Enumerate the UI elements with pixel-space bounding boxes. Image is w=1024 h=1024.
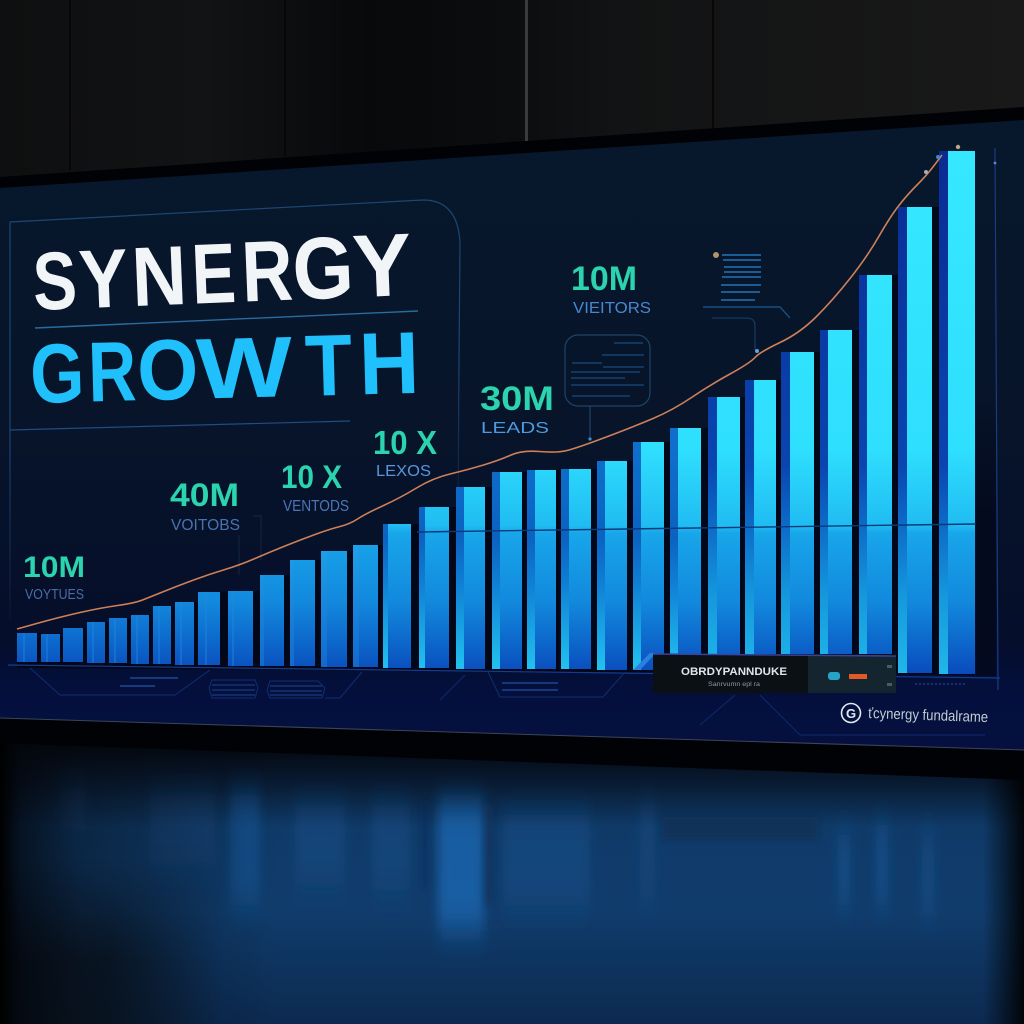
- chart base line: [8, 665, 1000, 678]
- lit wedge under panel: [633, 653, 656, 670]
- callout: 10M visitors: VIEITORS: [573, 300, 651, 317]
- bar 8: [175, 602, 194, 665]
- bar 1: [17, 633, 37, 662]
- screen bottom edge highlight: [0, 718, 1024, 750]
- callout: 40M visitors: [170, 477, 261, 575]
- bar 3: [63, 628, 83, 662]
- bar 7: [153, 606, 171, 664]
- callout: 40M visitors: VOITOBS: [171, 517, 240, 534]
- bar 13: [321, 551, 347, 667]
- info block: [703, 252, 790, 353]
- bar 28: [859, 275, 892, 672]
- callout: 10x leads: LEXOS: [376, 463, 431, 480]
- bar 18: [492, 472, 522, 669]
- callout bar: [653, 654, 896, 693]
- bar 12: [290, 560, 315, 666]
- bar chart: [17, 151, 975, 674]
- callout: 30M leads: [480, 380, 554, 437]
- bar 23: [670, 428, 701, 670]
- bar 25: [745, 380, 776, 671]
- callout: 10x leads: [373, 424, 437, 480]
- icon: blue pill: [828, 672, 840, 680]
- title: SYNERGY: Y: [350, 214, 413, 316]
- title: GROWTH: T: [304, 317, 353, 415]
- bar 26: [781, 352, 814, 671]
- note box: [565, 335, 650, 441]
- display bezel: [0, 107, 1024, 780]
- icon: orange pill: [849, 674, 867, 679]
- bar 19: [527, 470, 556, 669]
- callout side buttons: [887, 665, 892, 686]
- title panel outline: [10, 200, 460, 620]
- title: SYNERGY: E: [190, 226, 238, 323]
- title: GROWTH: R: [87, 324, 137, 421]
- title: GROWTH: H: [358, 313, 420, 413]
- floor with reflections: [0, 742, 1024, 1024]
- bar 14: [353, 545, 378, 667]
- trend markers: [924, 145, 960, 174]
- callout subtext: Sanrvumn epl ra: [708, 682, 761, 688]
- callout: 10x leads: 10 X: [373, 424, 437, 461]
- growth trend line: [17, 155, 942, 629]
- callout heading: OBRDYPANNDUKE: [681, 666, 787, 678]
- title: GROWTH: O: [136, 322, 199, 419]
- bar 24: [708, 397, 740, 671]
- bar 10: [228, 591, 253, 666]
- bar 11: [260, 575, 284, 666]
- right axis: [994, 148, 998, 690]
- bar 9: [198, 592, 220, 665]
- bar 22: [633, 442, 664, 670]
- bar chart backdrop: [17, 151, 975, 675]
- callout: 10x vendors: VENTODS: [283, 498, 349, 515]
- title: SYNERGY: S: [31, 235, 79, 328]
- brand logo: ťcynergy fundalrame: [868, 705, 988, 726]
- callout: 10M visitors: [571, 260, 651, 317]
- brand logo: G: [846, 706, 856, 721]
- bar 17: [456, 487, 485, 669]
- bar 29: [898, 207, 932, 673]
- bar 16: [419, 507, 449, 668]
- bar 6: [131, 615, 149, 664]
- bar 5: [109, 618, 127, 663]
- brand logo: [842, 704, 988, 726]
- bar 30: [939, 151, 975, 674]
- callout: 10x vendors: [281, 459, 349, 515]
- bar 20: [561, 469, 591, 669]
- title divider: [35, 311, 418, 328]
- callout: 10x vendors: 10 X: [281, 459, 343, 495]
- callout: 10M voyages: [23, 551, 85, 603]
- bar 4: [87, 622, 105, 663]
- back wall: [0, 0, 1024, 190]
- title: SYNERGY: G: [291, 217, 356, 319]
- callout: 10M voyages: 10M: [23, 551, 85, 584]
- bar 27: [820, 330, 852, 672]
- title: GROWTH: G: [29, 326, 85, 421]
- callout: 10M voyages: VOYTUES: [25, 586, 84, 603]
- callout: 30M leads: 30M: [480, 380, 554, 418]
- chart horizontal rule: [417, 524, 976, 532]
- display screen: [0, 120, 1024, 750]
- callout: 30M leads: LEADS: [481, 420, 549, 437]
- title: GROWTH: W: [195, 319, 294, 418]
- title: SYNERGY: N: [130, 228, 189, 324]
- title: SYNERGY: R: [240, 223, 295, 321]
- right gutter shade: [976, 380, 996, 676]
- callout: 40M visitors: 40M: [170, 477, 239, 513]
- bar 21: [597, 461, 627, 670]
- chart footer details: [30, 668, 985, 735]
- bar 15: [383, 524, 411, 668]
- title: SYNERGY: Y: [77, 231, 130, 326]
- bar 2: [41, 634, 60, 662]
- callout: 10M visitors: 10M: [571, 260, 637, 298]
